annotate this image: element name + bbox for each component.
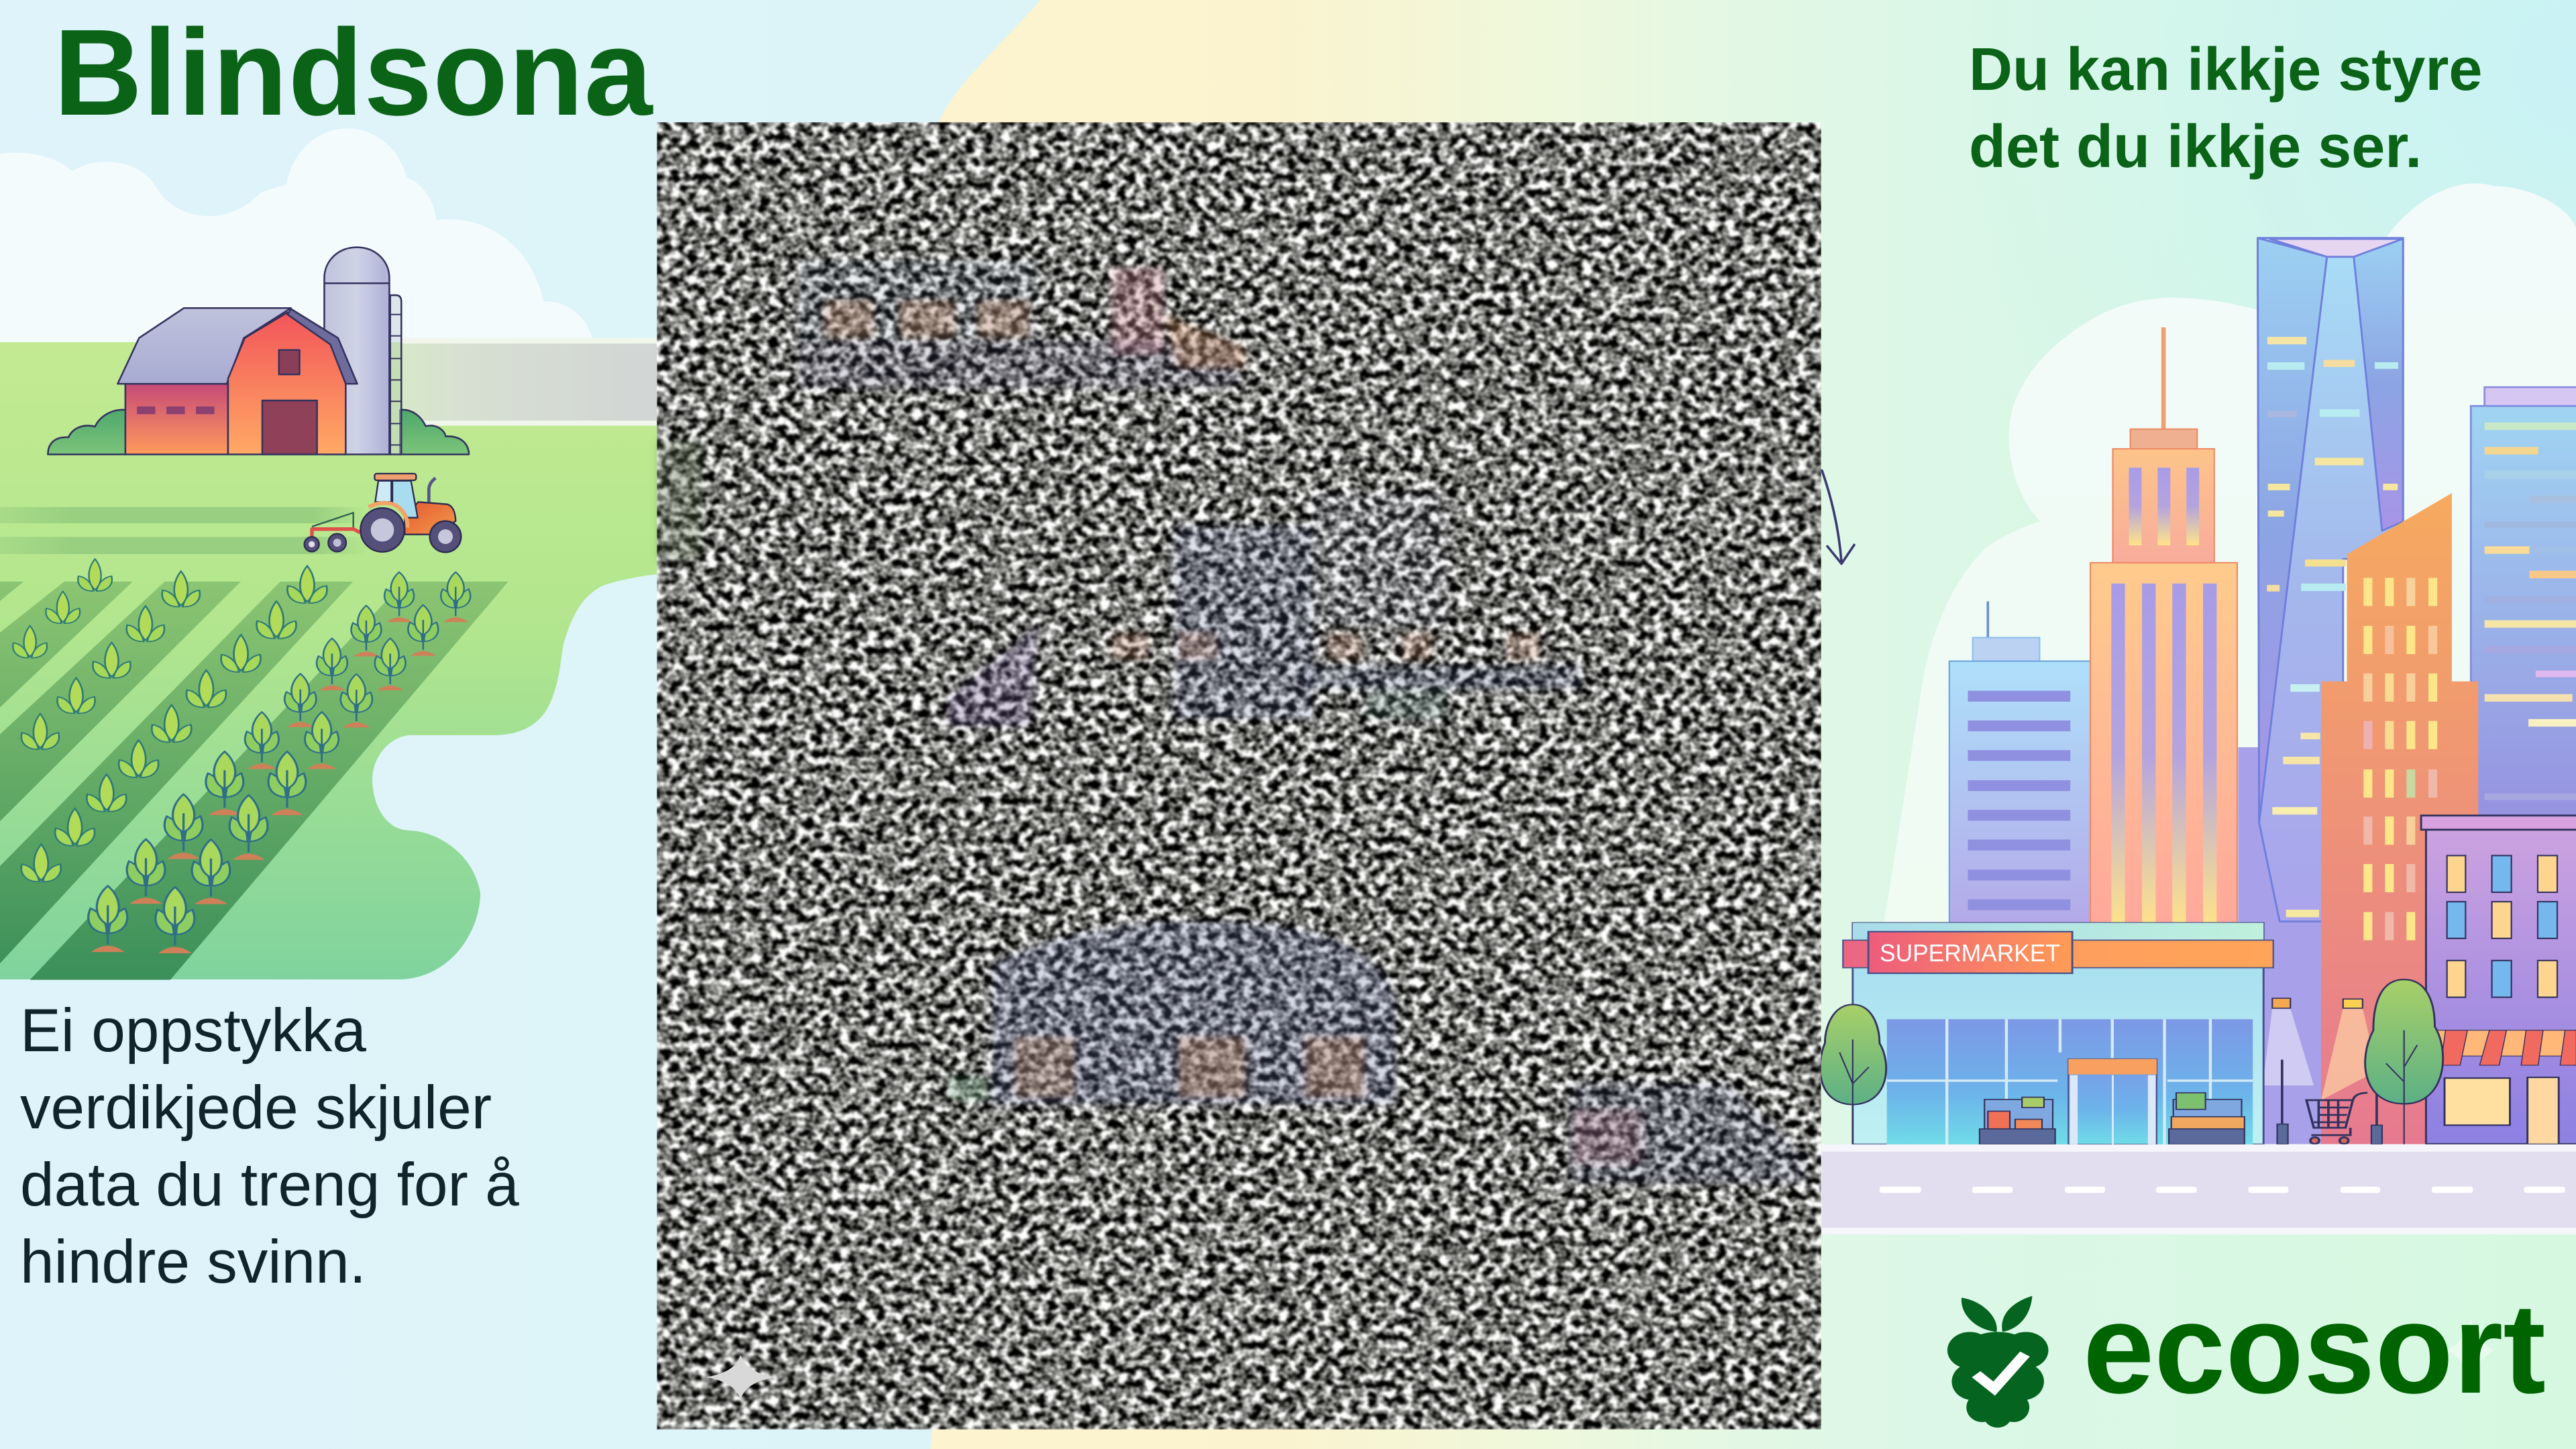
ecosort logo mark [1947, 1296, 2048, 1428]
clouds [0, 128, 661, 347]
street level [1820, 923, 2576, 1234]
barn and silo [48, 248, 469, 454]
distant grey band [402, 338, 657, 426]
pale cloud backdrop [1884, 183, 2576, 926]
noise image panel [657, 122, 1821, 1430]
barn roof [117, 308, 291, 384]
left blue building [1949, 601, 2090, 930]
tractor [305, 474, 461, 552]
stepped orange building [2321, 493, 2478, 1144]
right heading: Du kan ikkje styre [1969, 36, 2482, 103]
shopping cart [2306, 1093, 2367, 1144]
title: Blindsona [54, 3, 653, 141]
left body text: verdikjede skjuler [20, 1074, 492, 1142]
seedlings [13, 559, 327, 881]
street lamps [2252, 997, 2382, 1144]
city scene illustration [1820, 183, 2576, 1234]
sparkle watermark [706, 1355, 775, 1399]
right blue office block [2471, 387, 2576, 820]
right heading: det du ikkje ser. [1969, 113, 2422, 180]
left body text: hindre svinn. [20, 1228, 366, 1296]
fruit body [1947, 1332, 2048, 1428]
green field ground [0, 342, 657, 979]
purple front building [2421, 816, 2576, 1144]
right tree [2365, 979, 2443, 1144]
check mark [1976, 1354, 2025, 1389]
silo [324, 248, 401, 454]
supermarket building [1843, 923, 2273, 1144]
field strips [0, 582, 508, 980]
ploughed rows in the distance [0, 507, 368, 554]
left body text: Ei oppstykka [20, 997, 366, 1065]
crop field [0, 559, 508, 980]
barn wing [125, 384, 228, 454]
sparkle near logo [2447, 1318, 2494, 1382]
left tree [1820, 1004, 1886, 1144]
glass tower [2257, 238, 2403, 922]
skyscrapers [1949, 238, 2576, 1144]
static noise [657, 122, 1821, 1430]
shopfront of purple building [2436, 1030, 2576, 1144]
shop windows [1887, 1019, 2253, 1144]
farm scene illustration [0, 128, 661, 980]
sprouts with soil [89, 572, 470, 953]
barn front [228, 313, 345, 454]
leaves [1962, 1297, 1997, 1332]
tower window lights [2267, 337, 2398, 917]
ecosort wordmark: ecosort [2083, 1277, 2546, 1420]
left body text: data du treng for å [20, 1151, 519, 1219]
road [1822, 1144, 2576, 1234]
arrow [1822, 470, 1854, 564]
entrance door [2068, 1059, 2157, 1144]
faint ghost shapes under the noise [657, 261, 1804, 1183]
bushes [48, 410, 469, 454]
produce displays [1980, 1093, 2245, 1144]
supermarket sign text: SUPERMARKET [1880, 939, 2060, 967]
back purple block [2238, 747, 2433, 1144]
central orange tower [2090, 327, 2237, 930]
